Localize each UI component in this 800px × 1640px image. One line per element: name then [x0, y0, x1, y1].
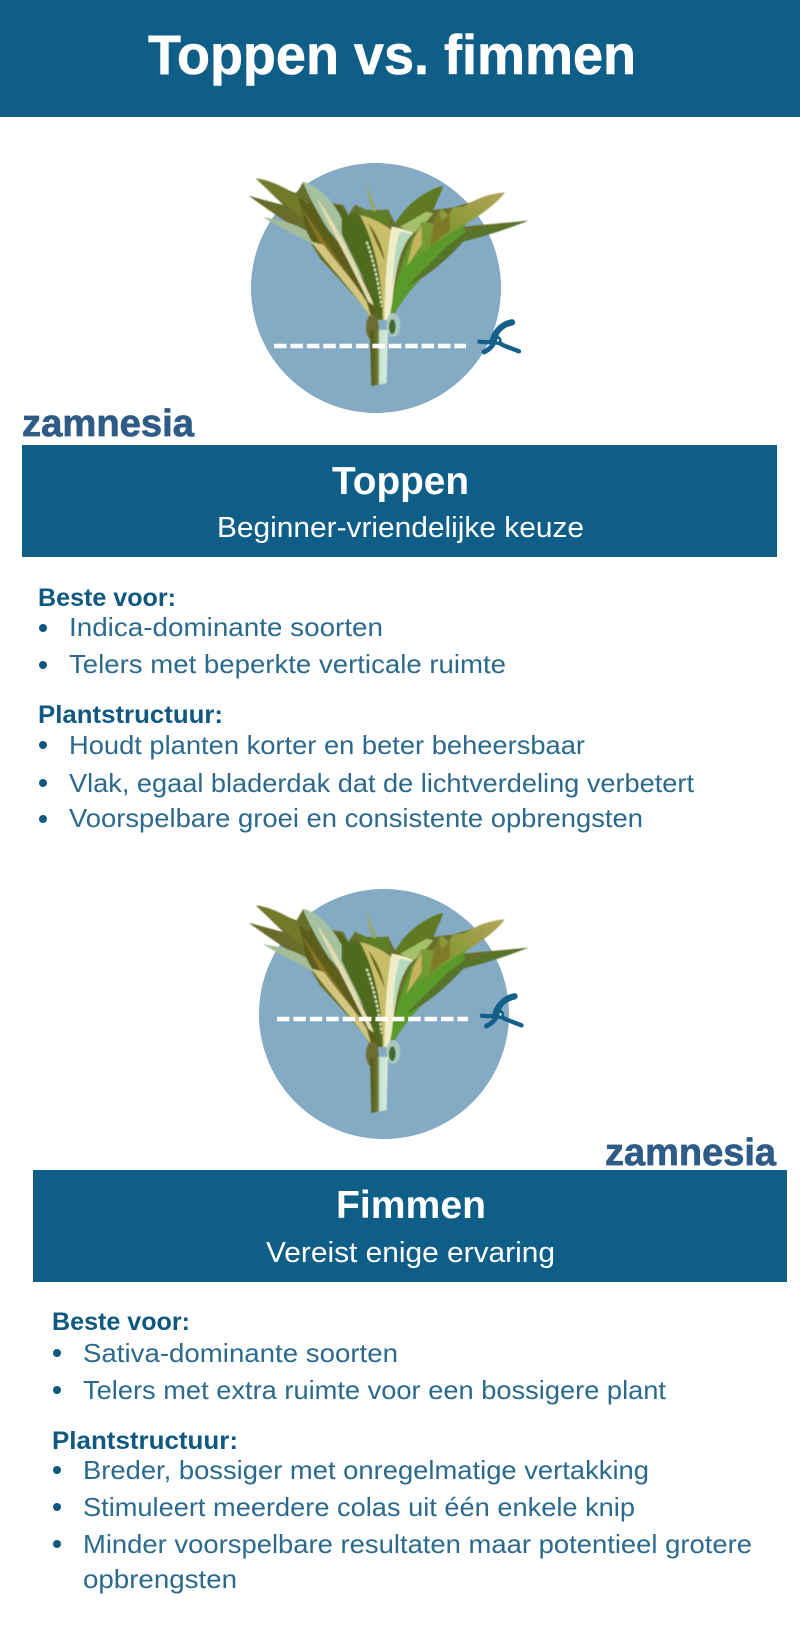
text block: Toppen details	[38, 584, 695, 833]
icon: pruning shears	[479, 322, 519, 352]
text block: Toppen details: Telers met beperkte verticale ruimte	[69, 649, 506, 679]
icon: pruning shears	[482, 996, 521, 1026]
cut line	[274, 344, 466, 348]
title banner	[0, 0, 800, 117]
text block: Fimmen details: Breder, bossiger met onregelmatige vertakking	[83, 1455, 649, 1485]
logo: zamnesia right: zamnesia	[605, 1132, 777, 1174]
text block: Fimmen details	[52, 1308, 752, 1594]
panel: Fimmen heading	[33, 1170, 787, 1282]
text block: Fimmen details: Minder voorspelbare resultaten maar potentieel grotere	[83, 1529, 752, 1559]
text block: Fimmen details: Sativa-dominante soorten	[83, 1338, 398, 1368]
text block: Toppen details: Vlak, egaal bladerdak dat de lichtverdeling verbetert	[69, 768, 695, 798]
text block: Fimmen details: Stimuleert meerdere colas uit één enkele knip	[83, 1492, 635, 1522]
text block: Toppen details: Voorspelbare groei en consistente opbrengsten	[69, 803, 643, 833]
heading: Plantstructuur: Plantstructuur:	[38, 701, 223, 729]
illustration: fimming plant	[249, 889, 528, 1139]
heading: Plantstructuur: Plantstructuur:	[52, 1427, 238, 1455]
heading: Toppen	[332, 460, 469, 503]
title: Toppen vs. fimmen	[148, 23, 636, 86]
icon: plant	[249, 905, 528, 1113]
icon: plant	[249, 178, 528, 386]
logo: zamnesia left: zamnesia	[22, 403, 195, 445]
subheading: Beginner-vriendelijke keuze	[217, 512, 584, 544]
text block: Toppen details: Indica-dominante soorten	[69, 612, 383, 642]
text block: Fimmen details: opbrengsten	[83, 1564, 237, 1594]
cut line	[277, 1017, 468, 1021]
text block: Toppen details: Houdt planten korter en beter beheersbaar	[69, 730, 585, 760]
text block: Fimmen details: Telers met extra ruimte voor een bossigere plant	[83, 1375, 667, 1405]
heading: Fimmen	[336, 1184, 486, 1227]
illustration: topping plant	[249, 163, 528, 413]
panel: Toppen heading	[22, 445, 777, 557]
heading: Beste voor: Beste voor:	[52, 1308, 190, 1336]
heading: Beste voor: Beste voor:	[38, 584, 176, 612]
subheading: Vereist enige ervaring	[266, 1237, 555, 1269]
